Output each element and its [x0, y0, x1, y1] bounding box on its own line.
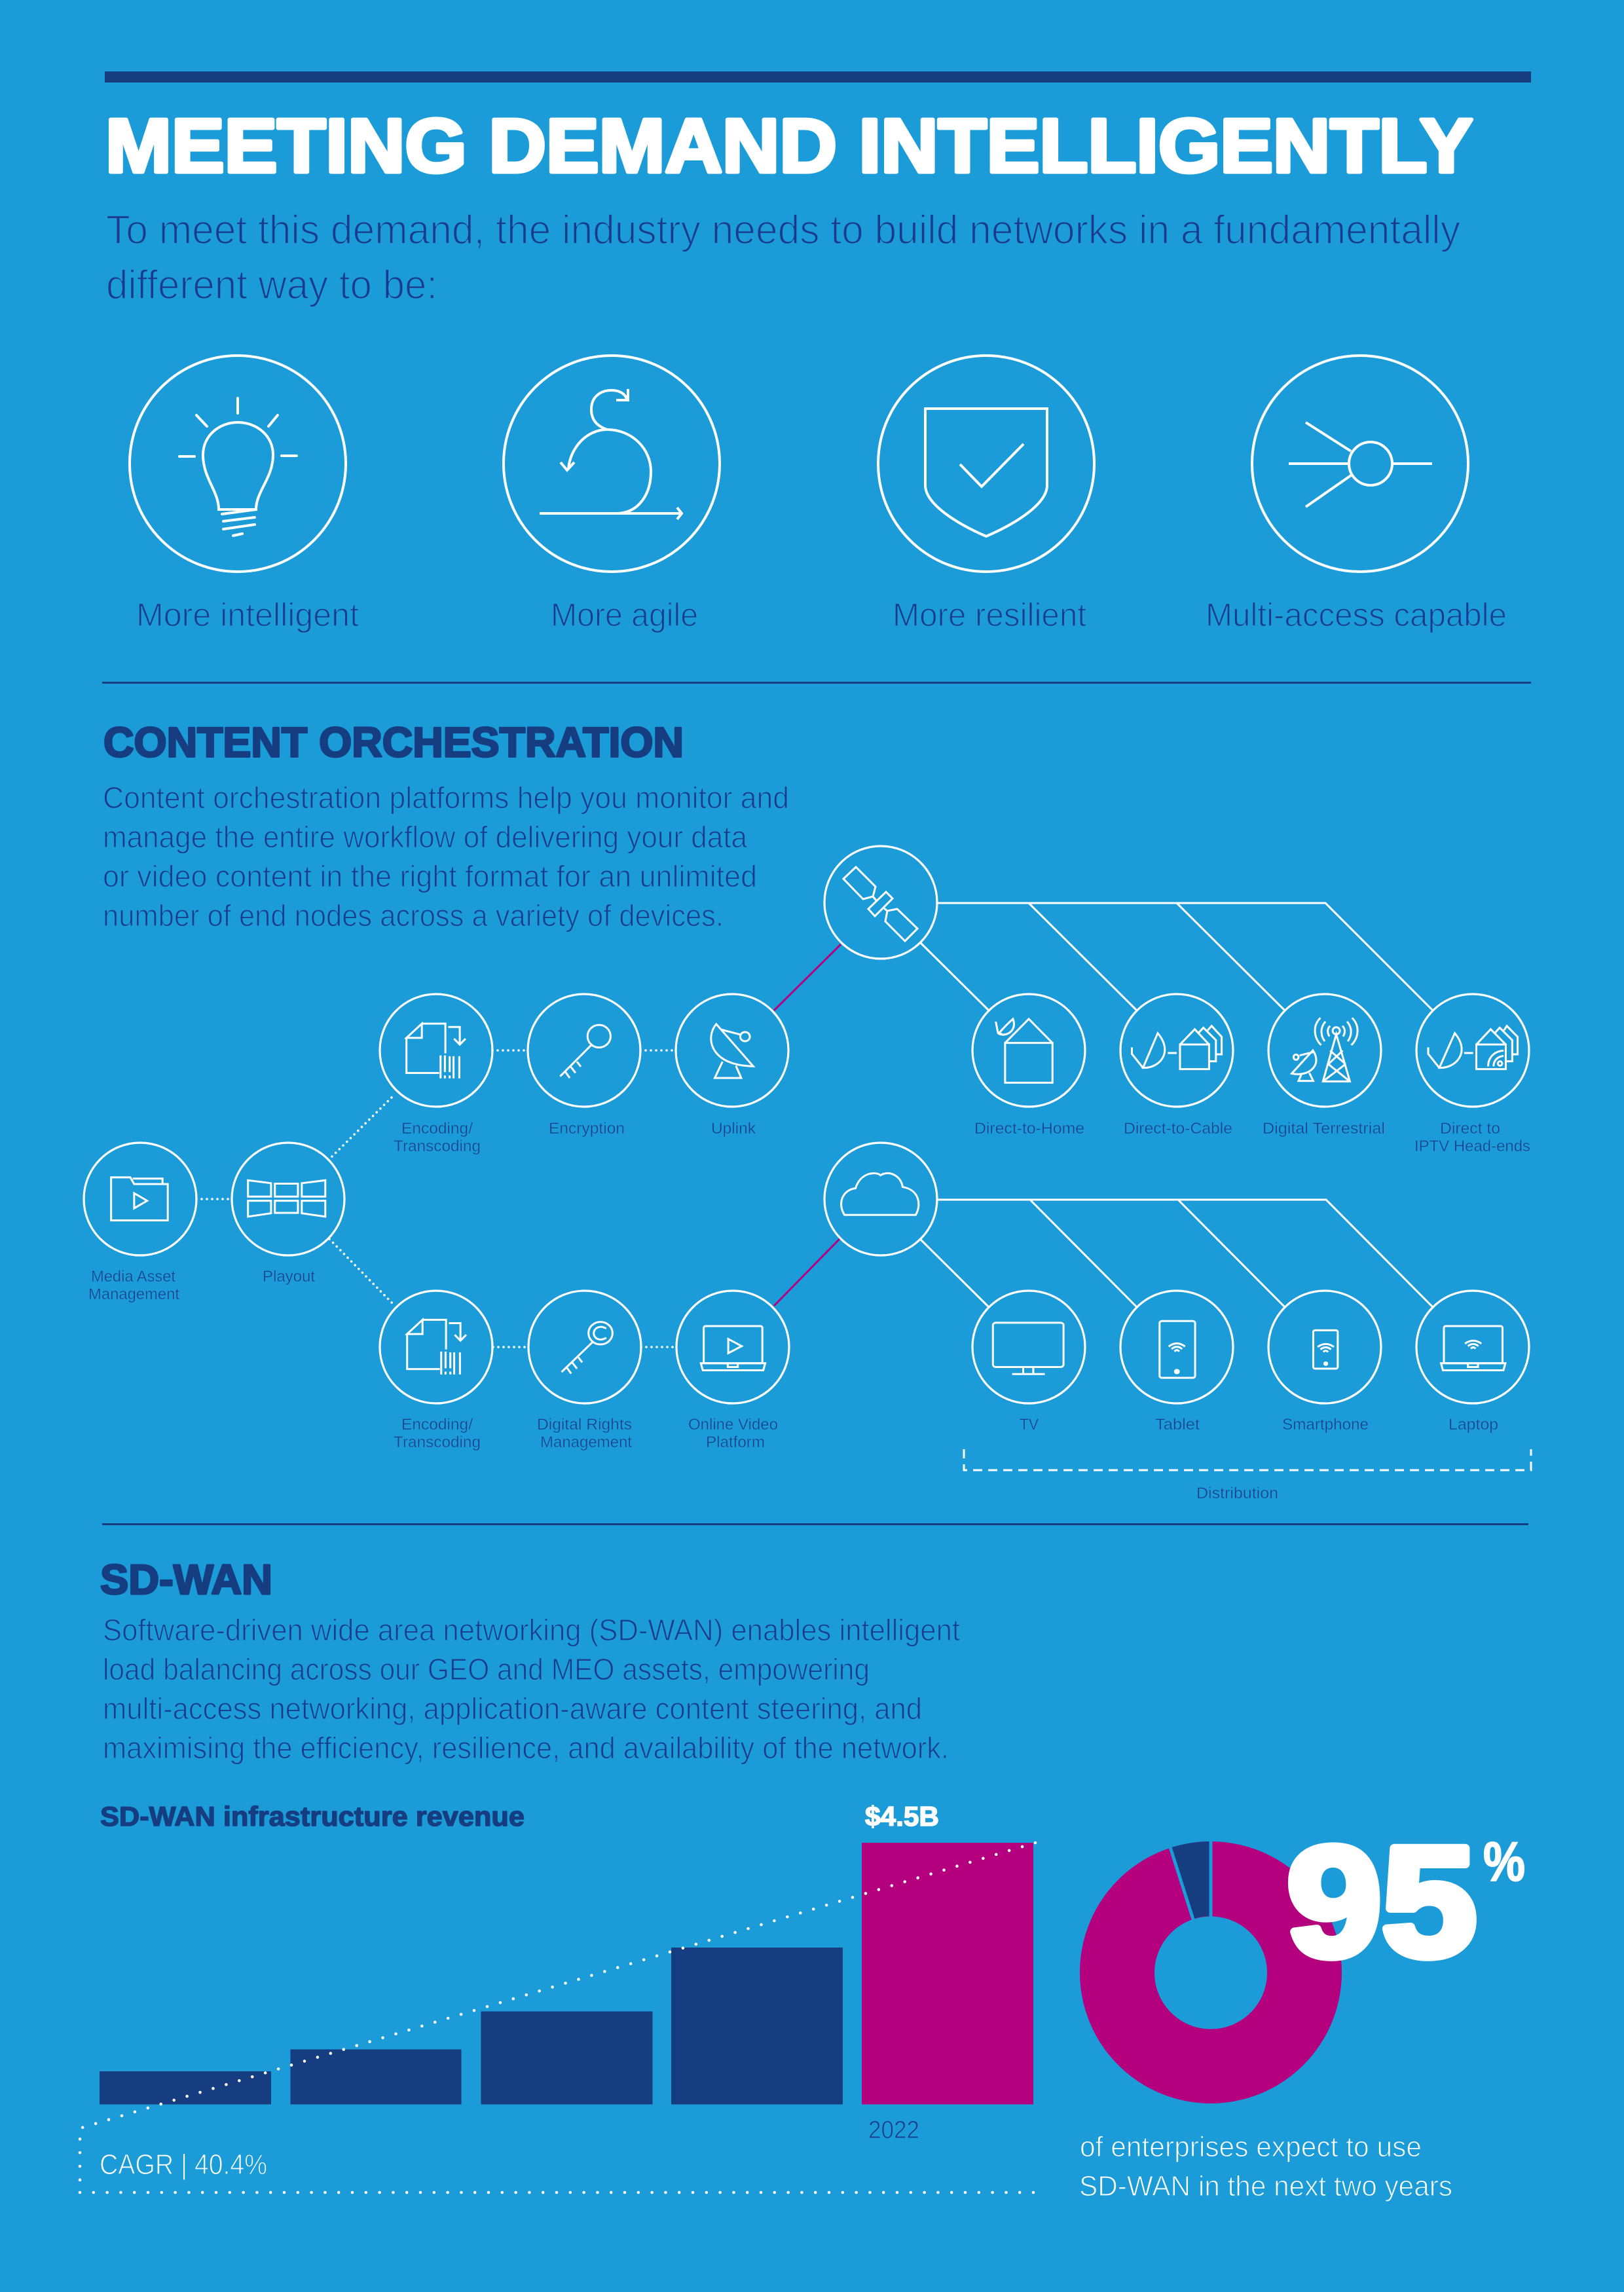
label: Encoding/ [401, 1120, 473, 1137]
label: Tablet [1155, 1416, 1200, 1433]
big number: 95 [1287, 1815, 1477, 1989]
node: direct-to-home [972, 994, 1085, 1137]
node: media asset management [84, 1143, 196, 1303]
icon: dish to iptv houses [1428, 1026, 1518, 1069]
donut caption [1079, 2131, 1452, 2202]
icon: laptop with wifi [1441, 1326, 1505, 1371]
label [394, 1416, 481, 1451]
label: Uplink [711, 1120, 756, 1137]
node: playout [232, 1143, 344, 1285]
icon: light bulb [179, 398, 297, 536]
subtitle: different way to be: [106, 263, 437, 308]
label: Digital Terrestrial [1263, 1120, 1385, 1137]
body text: maximising the efficiency, resilience, and availability of the network. [103, 1731, 949, 1765]
node: tablet [1120, 1291, 1233, 1433]
body text: multi-access networking, application-aware content steering, and [103, 1691, 922, 1726]
body text: Content orchestration platforms help you monitor and [103, 781, 789, 815]
label: Smartphone [1282, 1416, 1369, 1433]
panel: sd-wan [80, 1556, 1525, 2202]
icon: copyright key [562, 1322, 612, 1374]
bar chart: sd-wan infrastructure revenue [80, 1801, 1035, 2192]
body text: load balancing across our GEO and MEO assets, empowering [103, 1652, 870, 1686]
label: Transcoding [394, 1433, 481, 1451]
icon: document barcode [407, 1024, 466, 1079]
icon: house with dish [996, 1019, 1052, 1082]
node: laptop [1416, 1291, 1529, 1433]
node: tv [972, 1291, 1085, 1433]
node: digital rights management [528, 1291, 641, 1451]
label: More intelligent [136, 597, 359, 633]
node: direct to iptv head-ends [1414, 994, 1530, 1155]
body text [103, 1613, 960, 1765]
icon: smartphone with wifi [1313, 1330, 1338, 1369]
icon: cloud [841, 1174, 919, 1215]
body text: Software-driven wide area networking (SD-WAN) enables intelligent [103, 1613, 960, 1647]
node: satellite [824, 846, 937, 959]
item: more agile [504, 356, 720, 633]
icon: document barcode [407, 1320, 466, 1375]
label: Encoding/ [401, 1416, 473, 1433]
connectors: satellite distribution lines [920, 903, 1433, 1010]
header [105, 71, 1531, 308]
node: uplink [676, 994, 788, 1137]
label: Laptop [1449, 1416, 1498, 1433]
cagr dotted trend [80, 1843, 1035, 2192]
label: TV [1020, 1416, 1039, 1433]
label: Encryption [549, 1120, 625, 1137]
icon: multi-access node [1289, 422, 1432, 507]
label: Management [540, 1433, 632, 1451]
year label: 2022 [868, 2116, 919, 2144]
label: Digital Rights [537, 1416, 632, 1433]
node: smartphone [1268, 1291, 1381, 1433]
bars [100, 1843, 1033, 2105]
label [1414, 1120, 1530, 1155]
node: online video platform [676, 1291, 789, 1451]
distribution bracket [964, 1449, 1531, 1502]
chart title: SD-WAN infrastructure revenue [100, 1801, 525, 1832]
label: Direct to [1440, 1120, 1500, 1137]
node: encoding transcoding bottom [380, 1291, 492, 1451]
label [688, 1416, 778, 1451]
icon: tower and dish [1292, 1018, 1357, 1081]
label: More agile [551, 597, 698, 633]
body text: number of end nodes across a variety of devices. [103, 898, 724, 933]
icon: tablet with wifi [1160, 1321, 1195, 1378]
value label: $4.5B [865, 1801, 939, 1832]
connectors: dotted workflow links [196, 1050, 675, 1347]
label: Transcoding [394, 1137, 481, 1155]
panel: content orchestration [84, 719, 1531, 1502]
subtitle: To meet this demand, the industry needs to build networks in a fundamentally [106, 208, 1460, 253]
label: More resilient [893, 597, 1086, 633]
body text: manage the entire workflow of delivering your data [103, 820, 747, 854]
icon: uplink dish [711, 1024, 753, 1078]
icon: laptop with play [701, 1326, 766, 1371]
connectors: magenta uplinks [774, 944, 841, 1306]
icon: video wall [248, 1180, 325, 1217]
icon: folder with play [111, 1177, 168, 1221]
body text [103, 781, 789, 933]
label: Playout [263, 1268, 315, 1285]
icon: dish to houses [1132, 1026, 1222, 1069]
title: MEETING DEMAND INTELLIGENTLY [105, 103, 1473, 189]
label: Direct-to-Cable [1124, 1120, 1232, 1137]
label: Direct-to-Home [974, 1120, 1084, 1137]
node: digital terrestrial [1263, 994, 1385, 1137]
node: direct-to-cable [1120, 994, 1233, 1137]
icon: satellite [843, 867, 917, 941]
label: IPTV Head-ends [1414, 1137, 1530, 1155]
icon: key [560, 1025, 610, 1078]
donut caption: of enterprises expect to use [1080, 2131, 1422, 2163]
navy slice [1170, 1841, 1211, 1919]
panel: network qualities [130, 356, 1507, 633]
icon: shield with check [925, 409, 1047, 536]
label: Platform [706, 1433, 765, 1451]
donut chart: 95 percent [1079, 1815, 1525, 2202]
label [88, 1268, 179, 1303]
label [394, 1120, 481, 1155]
item: multi-access capable [1206, 356, 1507, 633]
heading: CONTENT ORCHESTRATION [103, 719, 684, 766]
body text: or video content in the right format for an unlimited [103, 859, 757, 893]
node: cloud [824, 1143, 937, 1255]
label: Distribution [1196, 1485, 1278, 1502]
percent sign: % [1483, 1831, 1525, 1893]
top bar [105, 71, 1531, 83]
item: more intelligent [130, 356, 359, 633]
label [537, 1416, 632, 1451]
donut caption: SD-WAN in the next two years [1079, 2170, 1452, 2202]
label: Multi-access capable [1206, 597, 1507, 633]
label: Media Asset [91, 1268, 175, 1285]
subtitle [106, 208, 1460, 308]
node: encryption [528, 994, 640, 1137]
label: Management [88, 1285, 179, 1303]
icon: television [993, 1323, 1063, 1374]
connectors: cloud distribution lines [920, 1200, 1433, 1307]
icon: agile loop arrow [540, 389, 682, 519]
cagr label: CAGR | 40.4% [100, 2149, 267, 2181]
label: Online Video [688, 1416, 778, 1433]
item: more resilient [878, 356, 1094, 633]
node: encoding transcoding top [380, 994, 492, 1155]
heading: SD-WAN [100, 1556, 272, 1603]
